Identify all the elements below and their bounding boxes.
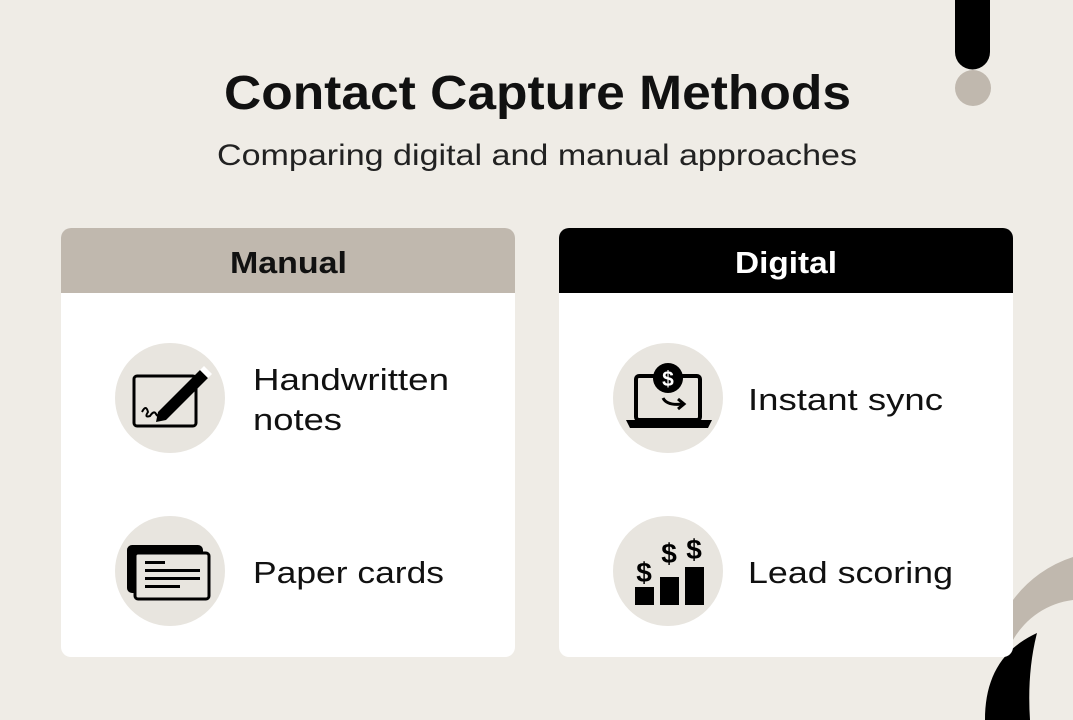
panel: digital (559, 228, 1013, 657)
label: instant sync: Instant sync (748, 382, 943, 417)
icon: handwritten notes (115, 343, 225, 453)
subtitle: Comparing digital and manual approaches (217, 139, 857, 172)
label: handwritten notes (253, 362, 449, 437)
header: digital: Digital (735, 245, 837, 280)
icon: lead scoring: $ (661, 538, 677, 569)
decoration: top right pill and dot (955, 0, 991, 106)
label: handwritten notes: notes (253, 402, 342, 437)
label: paper cards: Paper cards (253, 555, 444, 590)
panel: manual (61, 228, 515, 657)
icon: instant sync: $ (662, 368, 674, 391)
label: lead scoring: Lead scoring (748, 555, 953, 590)
label: handwritten notes: Handwritten (253, 362, 449, 397)
decoration: bottom right arc (985, 557, 1073, 720)
header: digital (559, 228, 1013, 293)
icon: paper cards (115, 516, 225, 626)
header: manual: Manual (230, 245, 347, 280)
title: Contact Capture Methods (224, 67, 851, 120)
header: manual (61, 228, 515, 293)
icon: lead scoring: $ (686, 534, 702, 565)
icon: lead scoring (613, 516, 723, 626)
icon: lead scoring: $ (636, 557, 652, 588)
icon: instant sync (613, 343, 723, 453)
